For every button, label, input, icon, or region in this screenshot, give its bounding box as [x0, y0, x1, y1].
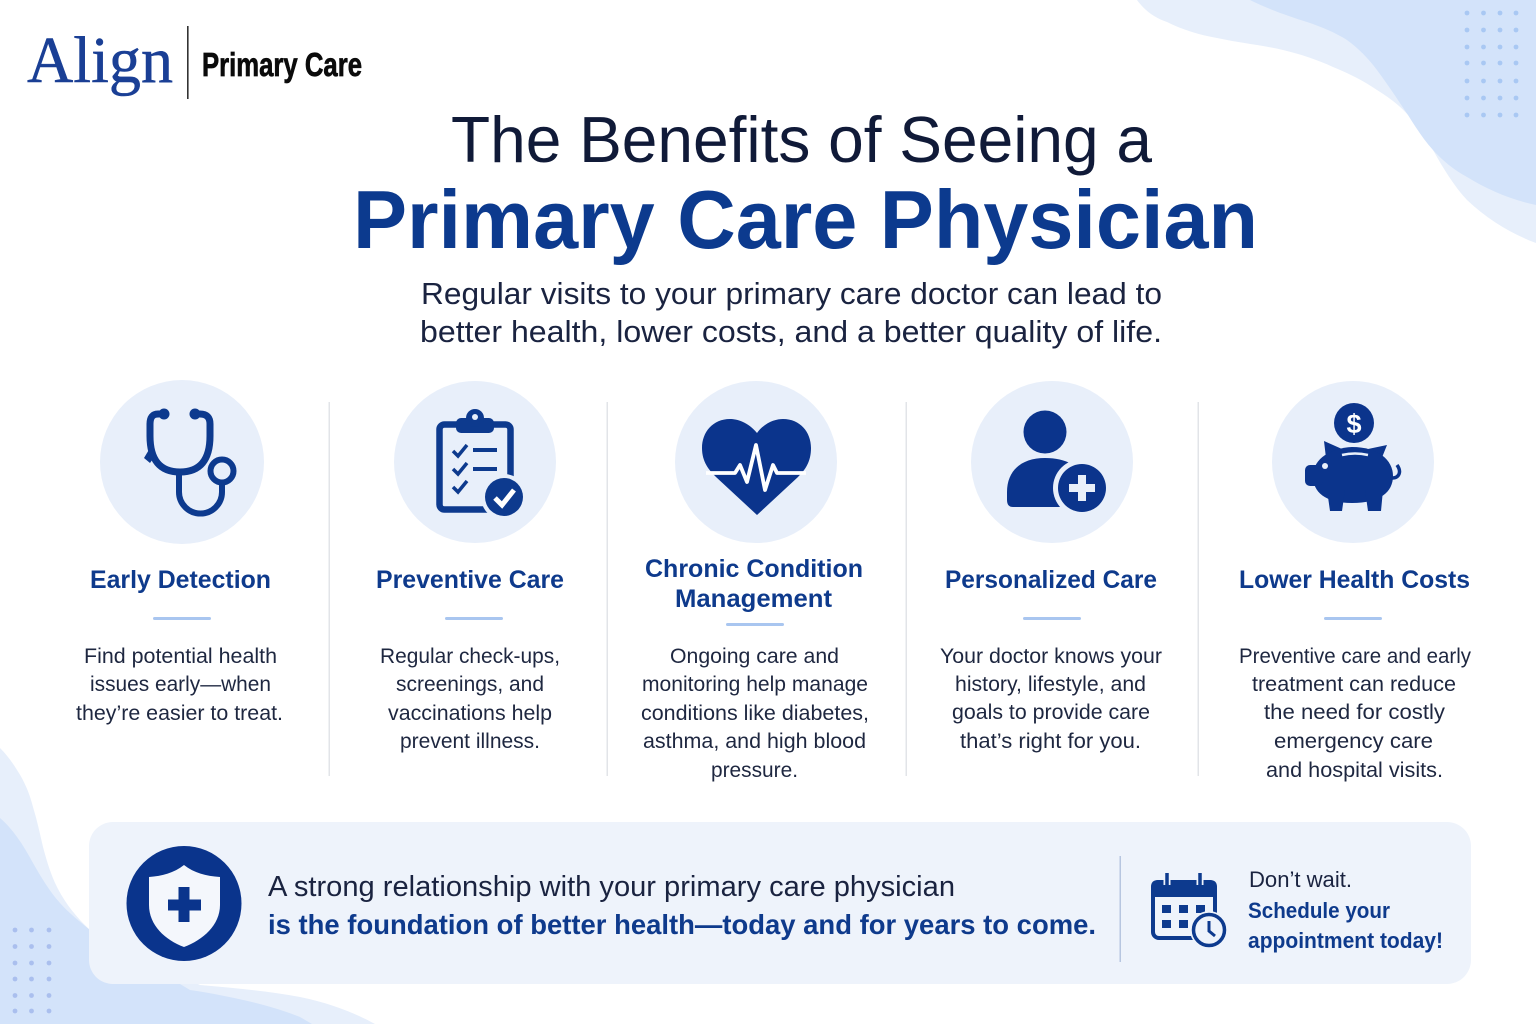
text: preventive care: [380, 645, 560, 753]
text: personalized care: that’s right for you.: [960, 730, 1141, 753]
text: personalized care: Your doctor knows your: [940, 645, 1162, 668]
logo: Align: [27, 24, 173, 97]
heading: preventive care: Preventive Care: [376, 566, 564, 594]
text: relationship message: is the foundation of better health—today and for years to come.: [268, 909, 1096, 940]
callout banner: [89, 822, 1471, 984]
text: lower health costs: and hospital visits.: [1266, 759, 1443, 782]
text: relationship message: [268, 871, 1096, 940]
panel: chronic condition management: [641, 381, 869, 782]
text: preventive care: vaccinations help: [388, 702, 552, 725]
text: relationship message: A strong relationship with your primary care physician: [268, 871, 955, 903]
panel: preventive care: [376, 381, 564, 753]
heading: chronic condition management: Management: [675, 585, 833, 613]
panel: personalized care: [940, 381, 1162, 753]
text: early detection: issues early—when: [90, 673, 271, 696]
title: The Benefits of Seeing a: [451, 103, 1153, 176]
dot pattern: top right: [1465, 11, 1518, 117]
heading: chronic condition management: [645, 555, 863, 613]
text: call to action: Don’t wait.: [1249, 867, 1352, 892]
text: lower health costs: treatment can reduce: [1252, 673, 1456, 696]
title: [353, 103, 1258, 266]
text: personalized care: history, lifestyle, and: [955, 673, 1146, 696]
heading: chronic condition management: Chronic Condition: [645, 555, 863, 583]
text: chronic condition management: Ongoing care and: [670, 645, 839, 668]
icon: stethoscope: [100, 380, 264, 544]
icon: person with plus: [971, 381, 1133, 543]
text: chronic condition management: conditions like diabetes,: [641, 702, 869, 725]
subtitle: better health, lower costs, and a better quality of life.: [420, 314, 1162, 349]
panel: early detection: [76, 380, 283, 725]
text: chronic condition management: [641, 645, 869, 782]
icon: shield with cross: [126, 846, 242, 961]
title: Primary Care Physician: [353, 173, 1258, 266]
icon: clipboard: [394, 381, 556, 543]
icon: calendar with clock: [1151, 873, 1228, 949]
text: chronic condition management: monitoring help manage: [642, 673, 868, 696]
background shape: bottom left waves: [0, 748, 375, 1024]
text: call to action: Schedule your: [1248, 898, 1390, 923]
text: call to action: appointment today!: [1248, 928, 1443, 953]
text: early detection: they’re easier to treat.: [76, 702, 283, 725]
text: personalized care: [940, 645, 1162, 753]
subtitle: Regular visits to your primary care doctor can lead to: [421, 276, 1162, 311]
dot pattern: bottom left: [13, 928, 51, 1013]
text: chronic condition management: pressure.: [711, 759, 798, 782]
icon: piggy bank with coin: [1272, 381, 1434, 543]
text: call to action: [1248, 867, 1443, 953]
heading: personalized care: Personalized Care: [945, 566, 1157, 594]
text: chronic condition management: asthma, and high blood: [643, 730, 866, 753]
heading: early detection: Early Detection: [90, 566, 271, 594]
logo: Primary Care: [202, 46, 362, 83]
text: personalized care: goals to provide care: [952, 701, 1150, 724]
text: early detection: Find potential health: [84, 645, 277, 668]
text: preventive care: screenings, and: [396, 673, 544, 696]
logo: [27, 24, 362, 99]
text: lower health costs: [1239, 645, 1471, 782]
text: early detection: [76, 645, 283, 725]
text: lower health costs: the need for costly: [1264, 701, 1446, 724]
text: preventive care: Regular check-ups,: [380, 645, 560, 668]
text: lower health costs: Preventive care and early: [1239, 645, 1471, 668]
icon: heart with pulse: [675, 381, 837, 543]
subtitle: [420, 276, 1162, 349]
background shape: top right waves: [1137, 0, 1536, 243]
text: lower health costs: emergency care: [1274, 730, 1433, 753]
panel: lower health costs: [1239, 381, 1471, 782]
icon: piggy bank with coin: $: [1346, 409, 1362, 439]
heading: lower health costs: Lower Health Costs: [1239, 566, 1470, 594]
text: preventive care: prevent illness.: [400, 730, 540, 753]
